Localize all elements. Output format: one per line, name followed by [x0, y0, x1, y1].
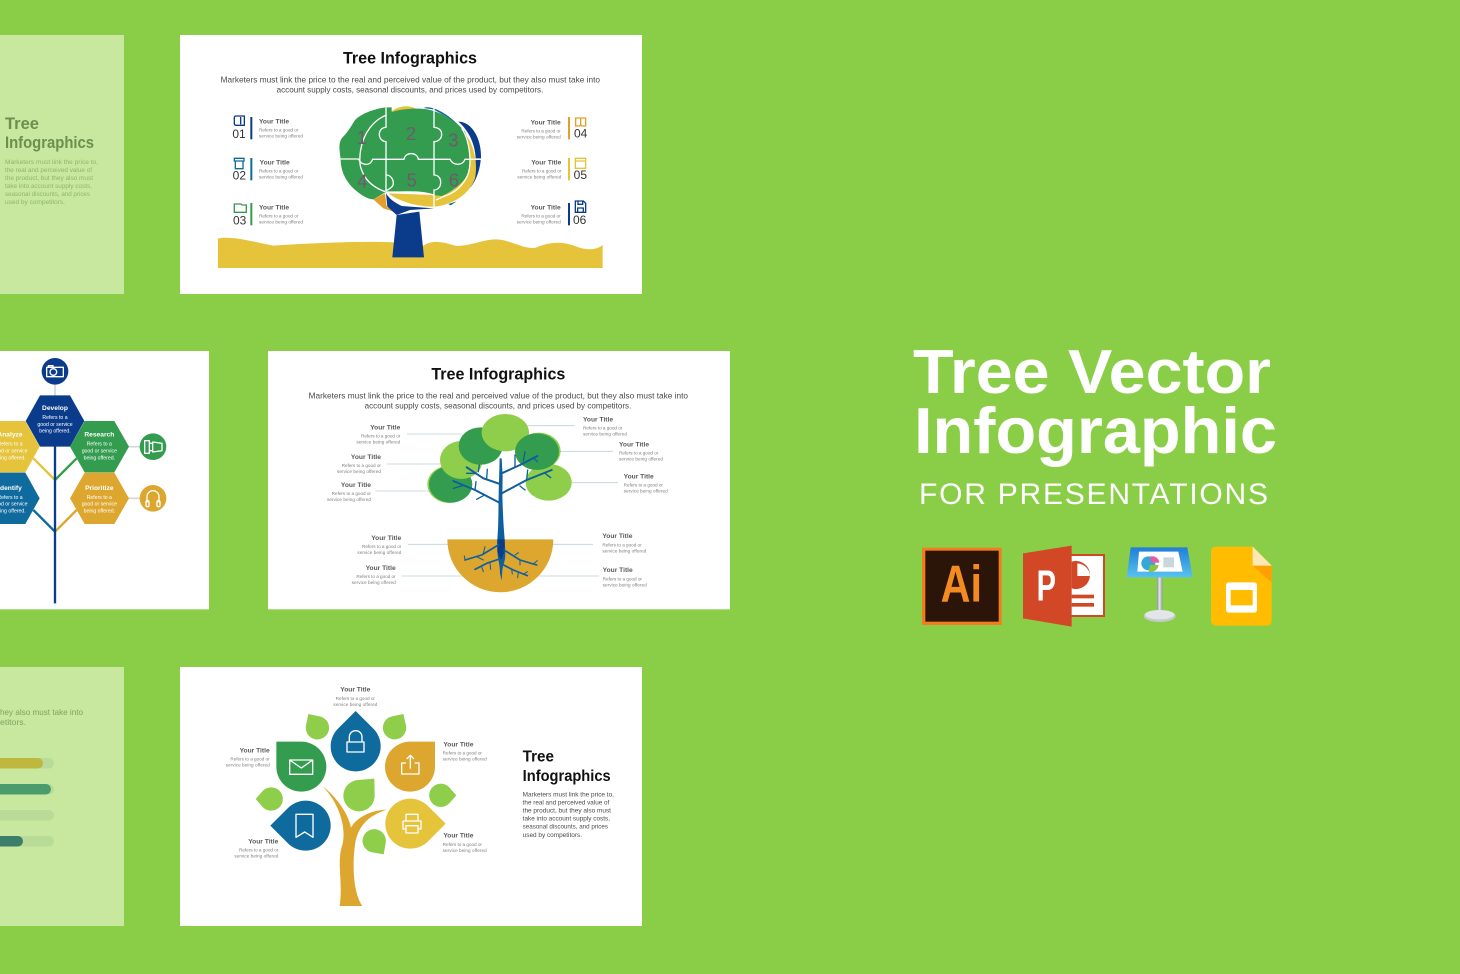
callout: canopy left middle [337, 454, 381, 474]
callout: item 01: 01 [232, 127, 246, 141]
panel: faded slide bottom left: hey also must take into [0, 707, 83, 717]
callout: item 06 [517, 201, 587, 227]
panel: hexagon analyze [0, 421, 40, 472]
callout: right bottom: service being offered [443, 848, 487, 853]
icon: printer drop [385, 799, 446, 849]
title: tree vector infographic [913, 338, 1277, 467]
icon: camera [42, 358, 68, 385]
chart: soil bowl [447, 539, 553, 592]
callout: right bottom [443, 833, 487, 853]
text block: drop slide intro: seasonal discounts, and prices [523, 824, 609, 831]
heading: drop slide title: Tree [523, 748, 554, 765]
callout: item 03: 03 [233, 213, 247, 227]
title: tree vector infographic: Tree Vector [913, 338, 1271, 407]
text block: root slide intro [309, 390, 688, 411]
callout: canopy left top: Your Title [370, 424, 401, 431]
icon: powerpoint: P [1037, 563, 1056, 611]
panel: hexagon prioritize: Prioritize [85, 485, 114, 492]
panel: faded slide bottom left: etitors. [0, 717, 26, 727]
callout: item 03: Your Title [259, 205, 289, 212]
callout: canopy right bottom: Refers to a good or [624, 483, 663, 488]
text block: drop slide intro: the real and perceived value of [523, 799, 609, 806]
panel: hexagon prioritize: good or service [82, 502, 117, 508]
chart: puzzle tree: 4 [357, 170, 368, 191]
panel: hexagon tree slide [0, 351, 209, 609]
callout: canopy right middle [619, 441, 663, 461]
callout: canopy right middle: Your Title [619, 441, 649, 448]
icon: headphones [140, 485, 166, 512]
callout: item 05 [517, 158, 587, 182]
panel: drop tree slide [180, 667, 642, 926]
callout: root left bottom: Refers to a good or [356, 574, 396, 579]
callout: item 02: Refers to a good or [259, 169, 299, 174]
panel: faded slide top left: the product, but they also must [5, 175, 93, 182]
panel: puzzle tree slide [180, 35, 642, 294]
callout: item 02: service being offered [259, 175, 303, 180]
panel: hexagon develop: Refers to a [42, 415, 68, 421]
callout: canopy right middle: service being offered [619, 456, 663, 461]
text block: drop slide intro: used by competitors. [523, 832, 582, 839]
callout: item 06: Refers to a good or [521, 214, 561, 219]
text block: drop slide intro: the product, but they also must [523, 807, 611, 814]
callout: item 02: Your Title [260, 160, 290, 167]
heading: drop slide title: Infographics [523, 768, 611, 785]
icon: google slides [1211, 547, 1272, 626]
panel: hexagon prioritize [70, 473, 129, 524]
callout: canopy right bottom [624, 473, 668, 494]
callout: canopy left bottom: Your Title [341, 482, 371, 489]
callout: item 05: Refers to a good or [522, 169, 562, 174]
panel: hexagon research: good or service [82, 448, 117, 454]
icon: lock drop [331, 711, 381, 771]
icon: binoculars [140, 433, 166, 460]
callout: item 01: Your Title [259, 119, 289, 126]
chart: puzzle tree: 5 [406, 170, 417, 191]
panel: hexagon research: Refers to a [87, 442, 112, 448]
chart: yellow ground [218, 238, 603, 268]
heading: drop slide title [523, 748, 611, 785]
callout: right bottom: Your Title [443, 833, 474, 840]
callout: top: Refers to a good or [336, 696, 375, 701]
callout: left bottom [234, 838, 279, 859]
panel: faded slide top left: Infographics [5, 134, 94, 152]
callout: root left bottom: service being offered [352, 580, 396, 585]
icon: app logos row [922, 546, 1272, 627]
title: tree vector infographic: Infographic [914, 394, 1277, 467]
callout: canopy right middle: Refers to a good or [619, 451, 659, 456]
chart: puzzle tree: 1 [357, 127, 367, 148]
text block: puzzle slide intro: Marketers must link the price to the real and perceived value of the product, but they also must take into [221, 74, 600, 84]
panel: hexagon research: Research [84, 432, 114, 439]
callout: root left bottom [352, 565, 396, 585]
panel: hexagon develop: being offered. [39, 429, 71, 435]
panel: hexagon research: being offered. [84, 455, 115, 461]
callout: root left top: Your Title [371, 535, 402, 542]
callout: root right top: service being offered [602, 548, 647, 553]
chart: puzzle tree: 6 [449, 170, 459, 191]
callout: root right bottom [603, 567, 647, 587]
panel: faded slide top left [0, 35, 124, 294]
text block: drop slide intro: take into account supply costs, [523, 815, 610, 822]
callout: canopy left top: service being offered [356, 439, 401, 444]
callout: root left bottom: Your Title [366, 565, 396, 572]
panel: hexagon develop [26, 395, 84, 447]
panel: hexagon develop: good or service [37, 422, 73, 428]
callout: item 05: Your Title [531, 160, 562, 167]
icon: powerpoint [1023, 546, 1104, 627]
callout: item 06: service being offered [517, 220, 561, 225]
chart: leader lines [376, 426, 618, 576]
panel: faded slide top left: take into account supply costs, [5, 183, 92, 190]
callout: left bottom: service being offered [234, 854, 279, 859]
callout: top [333, 687, 378, 707]
panel: faded slide bottom left [0, 667, 124, 926]
callout: item 03: service being offered [259, 220, 303, 225]
callout: root right top: Your Title [602, 533, 633, 540]
callout: item 02: 02 [233, 169, 246, 183]
panel: faded slide top left: Marketers must link the price to, [5, 159, 98, 166]
icon: illustrator: Ai [941, 555, 982, 613]
chart: puzzle tree [339, 106, 481, 257]
heading: puzzle slide title: Tree Infographics [343, 49, 477, 68]
callout: canopy left bottom: service being offered [327, 497, 371, 502]
callout: item 04: service being offered [517, 134, 561, 139]
chart: tree canopy [427, 414, 572, 503]
chart: puzzle tree: 3 [448, 130, 459, 151]
icon: mail drop [276, 742, 326, 792]
panel: hexagon research [70, 421, 129, 472]
callout: canopy right bottom: Your Title [624, 473, 654, 480]
text block: puzzle slide intro [221, 74, 600, 95]
callout: right top [443, 741, 487, 761]
callout: item 06: 06 [573, 213, 587, 227]
icon: keynote [1127, 547, 1193, 622]
callout: top: service being offered [333, 702, 378, 707]
callout: item 04: 04 [574, 126, 588, 140]
panel: faded slide top left: seasonal discounts, and prices [5, 191, 91, 198]
icon: bookmark drop [270, 801, 331, 851]
text block: root slide intro: account supply costs, seasonal discounts, and prices used by competitors. [365, 401, 631, 411]
callout: item 04: Refers to a good or [521, 129, 561, 134]
panel: hexagon prioritize: Refers to a [87, 495, 112, 501]
callout: right top: service being offered [443, 756, 487, 761]
callout: right top: Your Title [443, 741, 474, 748]
panel: hexagon prioritize: being offered. [84, 509, 115, 515]
chart: trunk branches and roots [453, 452, 552, 581]
callout: item 04: Your Title [531, 119, 561, 126]
callout: canopy left bottom [327, 482, 371, 502]
callout: item 06: Your Title [531, 205, 561, 212]
callout: canopy right top: Refers to a good or [583, 426, 623, 431]
callout: root right bottom: service being offered [603, 582, 647, 587]
callout: item 03 [233, 203, 303, 227]
callout: root left top: service being offered [357, 550, 402, 555]
panel: hexagon identify [0, 473, 40, 524]
panel: faded slide top left: Tree [5, 115, 39, 133]
callout: left bottom: Refers to a good or [239, 848, 279, 853]
chart: puzzle tree: 2 [406, 123, 416, 144]
callout: right bottom: Refers to a good or [443, 842, 482, 847]
callout: top: Your Title [340, 687, 371, 694]
callout: left top: Your Title [240, 747, 270, 754]
chart: small leaves [256, 714, 456, 854]
icon: share drop [385, 742, 435, 792]
callout: item 04 [517, 117, 588, 140]
chart: hexagon stem [33, 445, 77, 603]
text block: root slide intro: Marketers must link the price to the real and perceived value of the product, but they also must take into [309, 390, 688, 400]
callout: canopy left top: Refers to a good or [361, 433, 401, 438]
panel: faded slide top left: the real and perceived value of [5, 167, 92, 174]
callout: root left top: Refers to a good or [362, 544, 402, 549]
text block: drop slide intro: Marketers must link the price to, [523, 791, 614, 798]
chart: trunk [322, 786, 387, 906]
callout: root right top: Refers to a good or [602, 542, 642, 547]
callout: canopy right top: Your Title [583, 417, 613, 424]
callout: canopy left top [356, 424, 401, 444]
callout: item 02 [233, 158, 303, 183]
callout: left bottom: Your Title [248, 838, 279, 845]
callout: item 05: 05 [574, 168, 587, 182]
callout: canopy left middle: service being offered [337, 469, 381, 474]
icon: illustrator [922, 548, 1002, 625]
heading: root slide title: Tree Infographics [431, 365, 565, 384]
callout: right top: Refers to a good or [443, 751, 482, 756]
panel: faded slide top left: used by competitors. [5, 199, 65, 206]
callout: root right bottom: Your Title [603, 567, 633, 574]
callout: canopy right bottom: service being offered [624, 489, 668, 494]
callout: canopy left middle: Refers to a good or [342, 463, 381, 468]
panel: root tree slide [268, 351, 730, 609]
callout: item 01 [232, 116, 303, 141]
text block: for presentations: FOR PRESENTATIONS [919, 478, 1268, 511]
callout: root right bottom: Refers to a good or [603, 576, 642, 581]
callout: root left top [357, 535, 402, 555]
callout: left top [226, 747, 270, 768]
callout: item 05: service being offered [517, 175, 562, 180]
callout: item 03: Refers to a good or [259, 214, 299, 219]
callout: left top: service being offered [226, 763, 270, 768]
callout: left top: Refers to a good or [230, 757, 270, 762]
callout: canopy right top: service being offered [583, 432, 627, 437]
callout: canopy left bottom: Refers to a good or [332, 491, 371, 496]
callout: canopy left middle: Your Title [351, 454, 381, 461]
callout: canopy right top [583, 417, 627, 437]
callout: item 01: Refers to a good or [259, 128, 299, 133]
callout: item 01: service being offered [259, 133, 303, 138]
text block: puzzle slide intro: account supply costs, seasonal discounts, and prices used by competitors. [277, 85, 543, 95]
callout: root right top [602, 533, 647, 553]
panel: hexagon develop: Develop [42, 405, 68, 412]
text block: drop slide intro [523, 791, 614, 839]
